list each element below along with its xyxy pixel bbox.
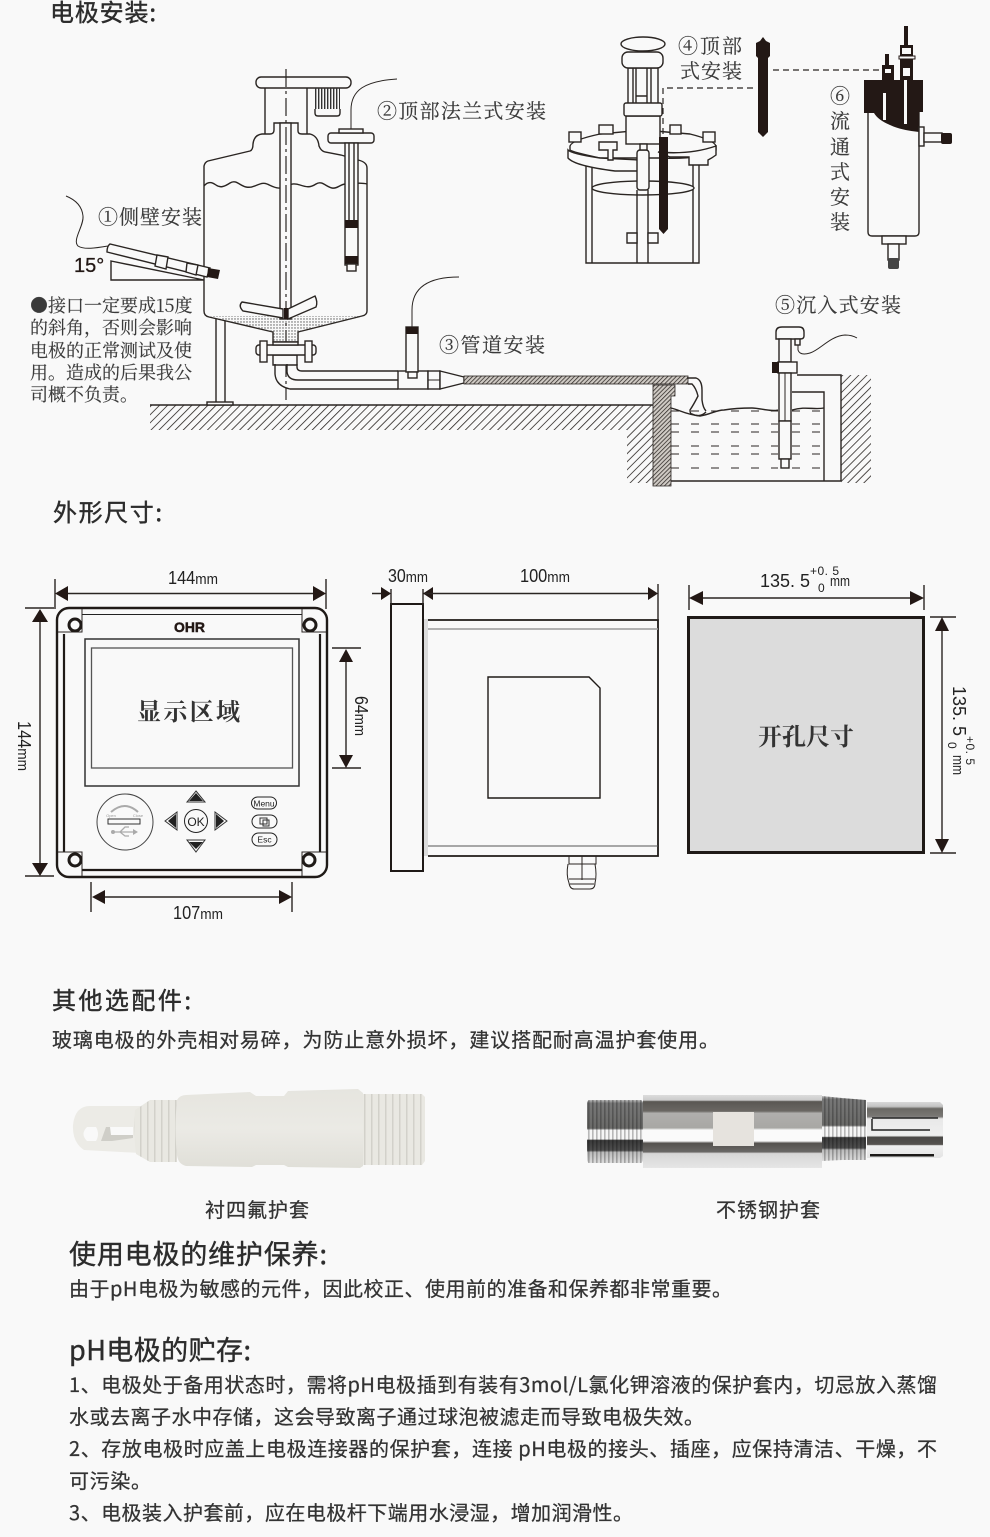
sleeve tip (73, 1106, 140, 1153)
terminal panel (488, 677, 600, 798)
liquid level (204, 182, 367, 188)
text: maintenance intro: 由于pH电极为敏感的元件，因此校正、使用前的准备和保养都非常重要。 (69, 1273, 732, 1302)
dimension: cutout height: 0 (945, 742, 959, 749)
diagram: top mounted reactor (568, 37, 880, 263)
usb port cover: Open (106, 813, 116, 818)
wrench flat (713, 1112, 754, 1146)
outlet pipe and T fitting (275, 364, 464, 389)
note: 15 degree warning: ●接口一定要成15度 (30, 292, 193, 318)
cable drop into water (687, 378, 706, 416)
caption: PTFE sleeve: 衬四氟护套 (205, 1194, 309, 1223)
flange electrode (328, 79, 397, 271)
label: immersion mount: ⑤沉入式安装 (775, 289, 901, 318)
dimension: front width 144mm (55, 568, 326, 609)
navigation keys (165, 791, 227, 852)
sleeve body (176, 1089, 363, 1168)
heading: other accessories: 其他选配件: (52, 981, 191, 1016)
agitator blades (240, 296, 317, 319)
text: accessories advice: 玻璃电极的外壳相对易碎，为防止意外损坏，建议搭配耐高温护套使用。 (52, 1024, 719, 1053)
text: storage instructions: 可污染。 (69, 1465, 151, 1494)
label: flow-through mount: 装 (830, 206, 850, 235)
dimension: display height 64mm: 64mm (351, 696, 371, 736)
cutout label: 开孔尺寸 (758, 717, 854, 752)
label: top mount (678, 30, 742, 84)
dashed link to loose electrode (663, 88, 757, 134)
dimension: cutout height: 135. 5 (949, 686, 969, 736)
dimension: cutout height (930, 617, 977, 853)
dimension: display width 107mm: 107mm (173, 903, 223, 923)
menu keys: Esc (257, 834, 272, 844)
bottom port (882, 236, 906, 269)
dashed link to flow cell (773, 69, 880, 71)
cell body (868, 112, 919, 236)
reactor vessel (586, 165, 699, 263)
label: side wall mount: ①侧壁安装 (98, 201, 202, 230)
reactor motor stack (621, 37, 665, 150)
left thread (587, 1100, 643, 1163)
side port (919, 127, 952, 146)
dimension: cutout width: 135. 5 (760, 571, 810, 591)
screws (69, 619, 316, 866)
label: top flange mount: ②顶部法兰式安装 (377, 95, 546, 124)
label: 15 degrees: 15° (74, 255, 104, 277)
housing inner lines (82, 614, 302, 616)
reactor flange and lid (568, 125, 716, 190)
text: storage instructions: 水或去离子水中存储，这会导致离子通过球泡被滤走而导致电极失效。 (69, 1401, 704, 1430)
menu keys (252, 797, 277, 846)
text: storage instructions: 1、电极处于备用状态时，需将pH电极插到有装有3mol/L氯化钾溶液的保护套内，切忌放入蒸馏 (69, 1369, 937, 1398)
photo: PTFE sleeve (73, 1089, 425, 1168)
label: flow-through mount: 式 (830, 156, 850, 185)
note: 15 degree warning: 的斜角，否则会影响 (30, 314, 192, 340)
right thread (822, 1096, 866, 1161)
cable with dense hatching (464, 376, 688, 384)
note: 15 degree warning: 用。造成的后果我公 (30, 359, 192, 385)
heading: maintenance: 使用电极的维护保养: (69, 1233, 327, 1272)
label: top mount: ④顶部 (678, 30, 742, 59)
housing (57, 608, 327, 877)
immersion electrode (772, 327, 857, 468)
slotted tip (867, 1102, 943, 1158)
cell cap (864, 80, 923, 132)
diagram: immersion installation (464, 327, 871, 486)
dimension: front width 144mm: 144mm (168, 568, 218, 588)
dimension: cutout width: +0. 5 (810, 564, 839, 578)
dimension: cutout width: 0 (818, 581, 825, 595)
dimension: front height 144mm (14, 608, 54, 876)
sediment (210, 316, 362, 342)
center body (643, 1095, 822, 1168)
diagram: side view (391, 604, 658, 889)
display area (92, 648, 292, 768)
brand logo: OHR (174, 619, 205, 635)
dimension: cutout height: +0. 5 (963, 736, 977, 765)
agitator shaft (280, 69, 291, 400)
loose electrode (756, 37, 770, 137)
label: flow-through mount: 流 (830, 105, 850, 134)
display area label: 显示区域 (137, 692, 240, 727)
label: pipe mount: ③管道安装 (439, 329, 545, 358)
text: storage instructions (69, 1369, 937, 1526)
diagram: flow-through cell (864, 26, 952, 269)
front bezel (391, 604, 423, 871)
note: 15 degree warning (30, 292, 193, 407)
display bezel (85, 639, 299, 786)
sleeve large thread (363, 1094, 425, 1165)
label: flow-through mount: 通 (830, 131, 850, 160)
note: 15 degree warning: 司概不负责。 (30, 381, 138, 407)
heading: outline dimensions: 外形尺寸: (53, 493, 162, 528)
enclosure (428, 620, 658, 856)
dimension: depth 100mm: 100mm (520, 566, 570, 586)
label: flow-through mount: 安 (830, 181, 850, 210)
bottom flange (256, 341, 316, 365)
note: 15 degree warning: 电极的正常测试及使 (30, 337, 192, 363)
text: storage instructions: 3、电极装入护套前，应在电极杆下端用水浸湿，增加润滑性。 (69, 1497, 633, 1526)
diagram: stirred tank with installations 1 and 2 (66, 69, 653, 483)
dimension: cutout width (689, 564, 924, 610)
text: storage instructions: 2、存放电极时应盖上电极连接器的保护套，连接 pH电极的接头、插座，应保持清洁、干燥，不 (69, 1433, 937, 1462)
cutout size panel (688, 618, 924, 852)
label: flow-through mount: ⑥ (830, 80, 850, 109)
dimension: display width 107mm (91, 882, 292, 923)
dimension: display height 64mm (332, 648, 371, 768)
pool right wall hatching (841, 375, 871, 483)
tank support leg (207, 317, 233, 405)
motor (256, 77, 351, 134)
usb port cover (97, 794, 153, 850)
sidewall electrode (66, 196, 220, 280)
pipe electrode (406, 277, 459, 378)
heading: storage: pH电极的贮存: (69, 1329, 251, 1368)
ground hatching (150, 405, 653, 483)
flow cell electrode heads (882, 26, 915, 80)
concrete wall (653, 385, 675, 486)
photo: stainless steel sleeve (587, 1095, 943, 1168)
cable gland (567, 856, 596, 889)
label: flow-through mount (830, 80, 850, 235)
dimension: cutout height: mm (949, 755, 966, 775)
caption: stainless steel sleeve: 不锈钢护套 (716, 1194, 820, 1223)
pool (671, 375, 841, 481)
dimension: bezel 30mm: 30mm (388, 566, 428, 586)
dimension: front height 144mm: 144mm (14, 721, 34, 771)
navigation keys: OK (187, 815, 205, 829)
diagram: front view (57, 608, 327, 877)
menu keys: Menu (253, 798, 275, 808)
tank body (204, 123, 367, 342)
dimension: bezel 30mm (372, 566, 433, 605)
top mount electrode (659, 137, 668, 234)
dimension: cutout width: mm (830, 573, 850, 590)
usb port cover: Close (133, 813, 144, 818)
label: top mount: 式安装 (680, 55, 742, 84)
dimension: depth 100mm (425, 566, 658, 620)
sleeve small thread (134, 1100, 177, 1162)
